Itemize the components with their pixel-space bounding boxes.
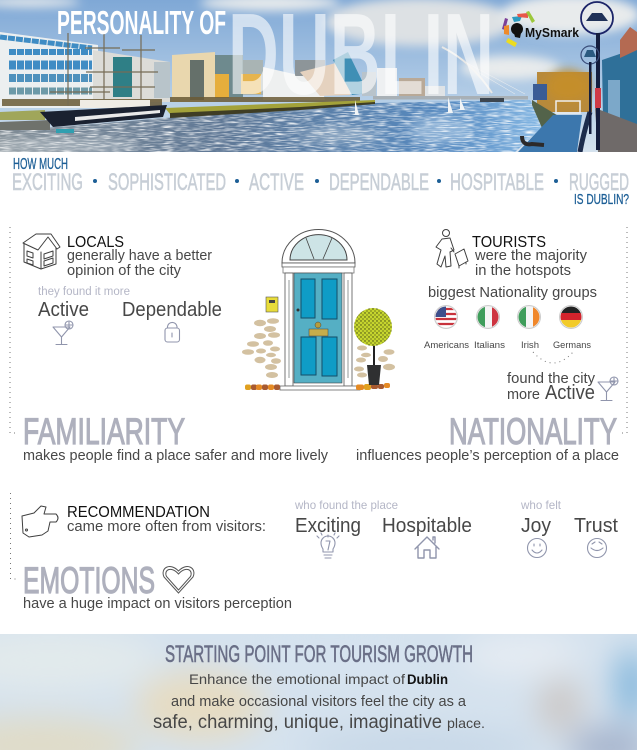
- icon: home: [415, 537, 439, 558]
- icon: Irish flag: [518, 306, 541, 328]
- heading: familiarity: FAMILIARITY: [23, 411, 185, 452]
- icon: heart: [163, 567, 194, 593]
- question band: how much ... is Dublin?: SOPHISTICATED: [108, 169, 226, 196]
- icon: light bulb: [317, 533, 339, 558]
- icon: cocktail: [598, 377, 618, 400]
- intercom: [266, 297, 278, 312]
- label: trust: Trust: [574, 515, 618, 537]
- text: biggest nationality groups: biggest Nationality groups: [428, 285, 597, 301]
- heading: recommendation: RECOMMENDATION: [67, 504, 210, 521]
- text: emotions description: have a huge impact on visitors perception: [23, 596, 292, 612]
- header photo: Dublin quays: [0, 0, 637, 154]
- icon: thumbs up: [22, 506, 58, 537]
- illustration: Georgian door: [242, 230, 395, 390]
- panel: recommendation: [22, 498, 618, 558]
- doorway arch and fanlight: [282, 230, 355, 263]
- text: familiarity description: makes people find a place safer and more lively: [23, 448, 329, 464]
- label: dependable: Dependable: [122, 299, 222, 321]
- text: locals opinion: [67, 248, 212, 279]
- labels: nationalities: Italians: [474, 340, 505, 351]
- panel: locals: [23, 234, 222, 344]
- icon: German flag: [560, 306, 582, 328]
- text: locals opinion: generally have a better: [67, 248, 212, 264]
- step: [280, 386, 360, 390]
- label: hospitable: Hospitable: [382, 515, 472, 537]
- labels: nationalities: Irish: [521, 340, 539, 351]
- icon: tourist with suitcase: [436, 230, 468, 268]
- text: closing message: safe, charming, unique, imaginative: [153, 712, 442, 733]
- text: closing message: place.: [447, 715, 485, 731]
- logo: MySmark: MySmark: [525, 25, 580, 40]
- text: tourists majority: [474, 248, 588, 279]
- cobbles: [242, 318, 395, 378]
- icon: wink: [588, 538, 606, 558]
- icon: padlock: [165, 322, 180, 342]
- text: tourists majority: in the hotspots: [475, 263, 571, 279]
- text: closing message: Enhance the emotional impact of: [189, 671, 405, 687]
- tall ship: [40, 33, 167, 133]
- icon: smile: [528, 538, 546, 558]
- heading: locals: LOCALS: [67, 234, 124, 251]
- Samuel Beckett bridge: [352, 47, 528, 115]
- far quay: [165, 100, 375, 114]
- panel: tourists: [424, 230, 618, 404]
- topiary plant: [373, 340, 375, 368]
- river water: [0, 100, 542, 152]
- text: found the city more active: Active: [545, 382, 595, 404]
- title: PERSONALITY OF: PERSONALITY OF: [57, 4, 226, 41]
- question band: how much ... is Dublin?: EXCITING: [12, 169, 83, 196]
- text: found the city more active: more: [507, 387, 540, 403]
- labels: nationalities: [424, 340, 591, 351]
- text: locals opinion: opinion of the city: [67, 263, 182, 279]
- heading: emotions: EMOTIONS: [23, 560, 155, 601]
- columns: [285, 273, 293, 386]
- panel: starting point for tourism growth: [0, 630, 637, 750]
- icon: US flag: [434, 306, 458, 328]
- icon: Italian flag: [476, 306, 500, 328]
- right quayside: [518, 2, 637, 152]
- text: came more often: came more often from visitors:: [67, 519, 266, 535]
- heading: tourists: TOURISTS: [472, 234, 546, 251]
- label: exciting: Exciting: [295, 515, 361, 537]
- caption: who found the place: who found the place: [294, 498, 398, 512]
- text: closing message: [153, 671, 485, 733]
- caption: they found it more: they found it more: [38, 286, 130, 298]
- text: found the city more active: found the city: [507, 371, 596, 387]
- label: joy: Joy: [521, 515, 551, 537]
- question band: how much ... is Dublin?: ACTIVE: [249, 169, 304, 196]
- labels: nationalities: Americans: [424, 340, 469, 351]
- door leaf: [294, 273, 342, 383]
- labels: nationalities: Germans: [553, 340, 591, 351]
- text: found the city more active: [507, 371, 596, 404]
- text: tourists majority: were the majority: [474, 248, 588, 264]
- text: closing message: and make occasional visitors feel the city as a: [171, 694, 467, 710]
- question band: how much ... is Dublin?: [12, 156, 629, 208]
- icon: cocktail: [53, 321, 73, 344]
- buildings: [0, 32, 445, 108]
- caption: who felt: who felt: [520, 498, 562, 512]
- text: closing message: Dublin: [407, 671, 448, 687]
- label: active: Active: [38, 299, 89, 321]
- text: nationality description: influences people’s perception of a place: [356, 448, 619, 464]
- icon: house: [23, 234, 60, 269]
- bricks: [245, 383, 390, 390]
- logo: MySmark: [502, 11, 580, 47]
- question band: how much ... is Dublin?: HOSPITABLE: [450, 169, 544, 196]
- question band: how much ... is Dublin?: HOW MUCH: [13, 156, 68, 173]
- question band: how much ... is Dublin?: DEPENDABLE: [329, 169, 429, 196]
